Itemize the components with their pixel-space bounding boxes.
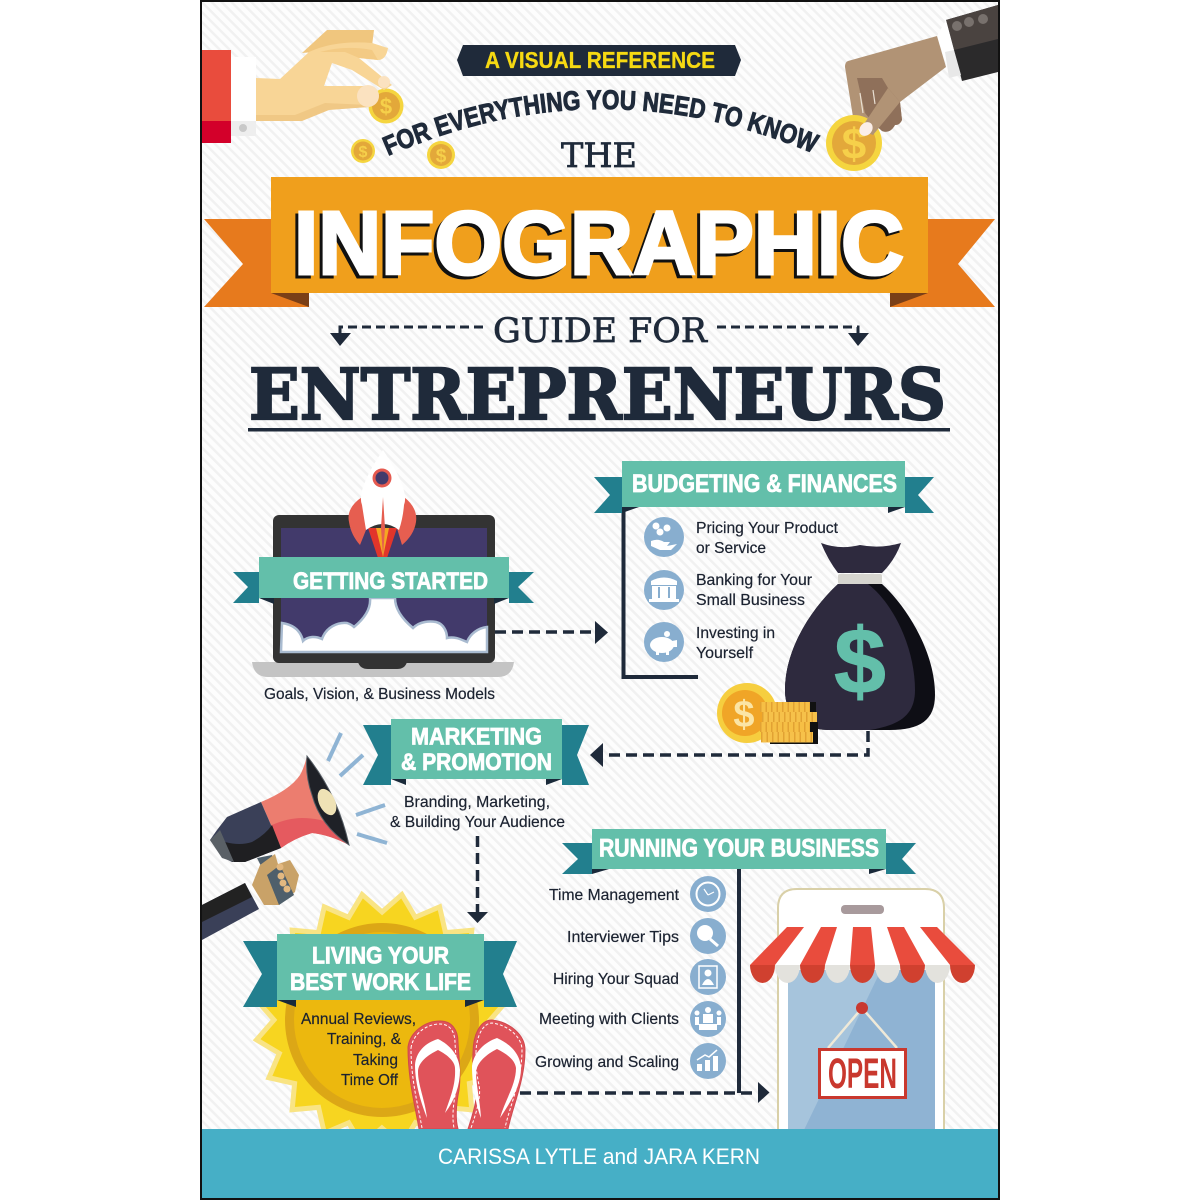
item: meeting with clients: Meeting with Clients [539,1011,679,1028]
ribbon: marketing: & PROMOTION [401,749,552,776]
text: investing [696,625,775,662]
panel: marketing and promotion [363,719,589,831]
cover background [201,1,999,1199]
icon: right hand holding coin [826,5,998,171]
item: hiring your squad [553,959,726,995]
ribbon: budgeting [594,461,934,513]
icon: left hand dropping coin [202,30,404,143]
curved tagline: FOR EVERYTHING YOU NEED TO KNOW [382,90,821,156]
icon: small falling coin [351,139,375,163]
caption: work life: Time Off [341,1072,399,1089]
ribbon: living your best work life [243,934,517,1007]
arrow: budgeting to marketing [590,731,868,767]
icon: money bag [785,543,935,730]
caption: marketing [390,794,565,831]
icon: left hand dropping coin: $ [380,94,392,119]
item: interviewer tips [567,918,726,954]
ribbon: living your best work life: LIVING YOUR [312,942,449,970]
phone speaker [841,905,884,914]
open sign [820,1002,906,1098]
heading: guide for with arrows: GUIDE FOR [493,311,708,351]
icon: pricing hand and coins [644,517,684,557]
icon: rocket [349,450,416,558]
text: investing: Yourself [696,645,754,662]
icon: right hand holding coin: $ [842,120,866,169]
icon: phone storefront [750,889,975,1130]
item: time management [549,876,726,912]
phone body [778,889,944,1130]
authors: CARISSA LYTLE and JARA KERN [438,1144,760,1169]
ribbon: budgeting: BUDGETING & FINANCES [632,470,897,498]
arrow: work life to shop [520,1082,770,1103]
banner: infographic: INFOGRAPHIC [294,194,904,294]
phone screen [788,970,935,1130]
item: hiring your squad: Hiring Your Squad [553,971,679,988]
caption: marketing: & Building Your Audience [390,814,565,831]
banner: infographic: INFOGRAPHIC [291,197,901,297]
text: investing: Investing in [696,625,775,642]
icon: bank [644,570,684,610]
caption: work life: Taking [353,1052,398,1069]
ribbon: running your business: RUNNING YOUR BUSINESS [599,834,879,862]
panel: living your best work life [237,875,527,1165]
icon: laptop [252,515,514,677]
text: banking: Banking for Your [696,572,813,589]
text: banking [696,572,813,609]
icon: megaphone with hand [202,756,349,940]
caption: work life: Training, & [327,1031,401,1048]
vertical connector [737,869,741,1093]
panel: running your business [535,829,916,1093]
item: growing and scaling [535,1043,726,1079]
item: time management: Time Management [549,887,680,904]
caption: getting started: Goals, Vision, & Business Models [264,686,495,703]
icon: clouds and smoke [281,598,487,652]
icon: gold coins [717,683,818,744]
ribbon: getting started: GETTING STARTED [293,568,488,595]
icon: falling coin: $ [436,146,447,167]
icon: flip flops [408,1020,525,1129]
panel: getting started [233,450,534,703]
text: banking: Small Business [696,592,805,609]
icon: small falling coin: $ [359,144,368,161]
footer band [202,1129,998,1198]
heading: entrepreneurs: ENTREPRENEURS [249,353,946,436]
text: pricing: or Service [696,540,766,557]
item: meeting with clients [539,1001,726,1037]
banner: infographic [204,177,995,307]
icon: gold coins: $ [733,694,755,736]
arrow: marketing to work life [467,836,488,923]
icon: sound rays [328,733,387,843]
awning [750,927,975,983]
panel: budgeting and finances [594,461,934,677]
arrow: getting started to budgeting [495,621,608,644]
open sign: OPEN [828,1050,897,1098]
icon: money bag: $ [834,609,886,713]
ribbon: marketing [363,719,589,785]
text: pricing [696,520,839,557]
icon: falling coin [427,141,455,169]
item: interviewer tips: Interviewer Tips [567,929,679,946]
icon: piggy bank [644,622,684,662]
badge: a visual reference: A VISUAL REFERENCE [485,47,715,73]
icon: sun badge [237,875,527,1165]
caption: work life: Annual Reviews, [301,1011,416,1028]
ribbon: marketing: MARKETING [411,724,542,750]
caption: work life [301,1011,416,1089]
ribbon: living your best work life: BEST WORK LIFE [290,969,471,996]
ribbon: getting started [233,557,534,604]
text: pricing: Pricing Your Product [696,520,839,537]
heading: the: THE [561,136,637,176]
heading: guide for with arrows [330,311,869,351]
ribbon: running your business [562,829,916,874]
caption: marketing: Branding, Marketing, [404,794,550,811]
item: growing and scaling: Growing and Scaling [535,1054,679,1071]
